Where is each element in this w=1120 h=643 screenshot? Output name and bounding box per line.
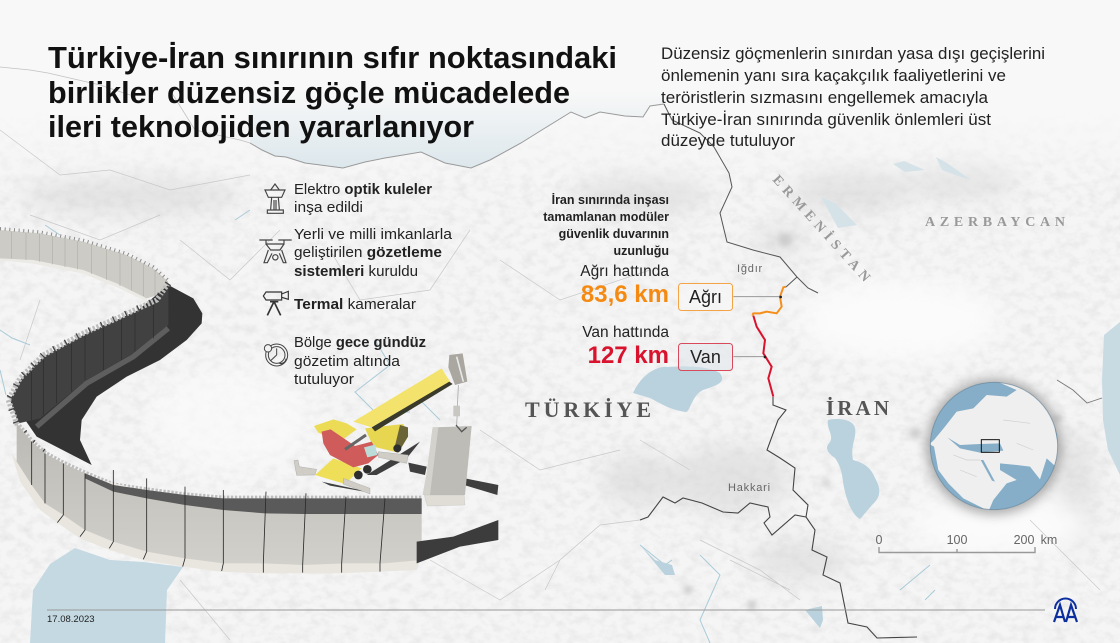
scale bar: 0 (876, 533, 883, 547)
text: surveillance systems: Yerli ve milli imkanlarla (294, 226, 453, 243)
van figure (582, 324, 669, 369)
text: day and night: tutuluyor (294, 371, 354, 388)
city labels: Hakkari (728, 482, 771, 494)
country labels: AZERBAYCAN (925, 215, 1065, 230)
wall length heading (543, 192, 669, 258)
van figure: 127 km (588, 342, 669, 369)
lake van (633, 366, 722, 412)
feature list (259, 181, 453, 388)
lake urmia (827, 419, 879, 519)
scale bar: 100 (947, 533, 967, 547)
title (48, 40, 617, 144)
text: thermal cameras: Termal kameralar (294, 296, 416, 313)
icon: tower (265, 184, 285, 213)
crane boom (353, 353, 467, 431)
text: electro optic towers (294, 181, 432, 216)
front wall panels (17, 423, 422, 573)
far wall section (0, 229, 168, 299)
text: surveillance systems: sistemleri kuruldu (294, 263, 418, 280)
title: ileri teknolojiden yararlanıyor (48, 109, 474, 144)
country labels: TÜRKİYE (525, 397, 651, 422)
intro paragraph: Türkiye-İran sınırında güvenlik önlemleri üst (661, 110, 991, 129)
locator globe (923, 378, 1062, 517)
wall illustration (0, 229, 498, 573)
intro paragraph: Düzensiz göçmenlerin sınırdan yasa dışı geçişlerini (661, 45, 1045, 63)
city labels (728, 263, 771, 494)
logo: AA (1054, 598, 1077, 622)
hook (453, 385, 467, 432)
agri figure (580, 263, 669, 308)
crane deck (315, 458, 362, 484)
wheels (354, 444, 401, 479)
van label box (678, 344, 732, 370)
country labels (525, 171, 1065, 422)
mobile crane and wall panel (294, 353, 498, 506)
red cabin (322, 429, 378, 467)
lakes in the north-east (821, 157, 971, 228)
text: electro optic towers: inşa edildi (294, 199, 363, 216)
agri label box (678, 284, 732, 310)
intro paragraph: teröristlerin sızmasını engellemek amacıyla (661, 89, 989, 107)
wall length heading: güvenlik duvarının (559, 227, 669, 241)
text: day and night: Bölge gece gündüz (294, 334, 426, 351)
outriggers (294, 452, 408, 494)
intro paragraph: düzeyde tutuluyor (661, 132, 796, 150)
wall length heading: tamamlanan modüler (543, 210, 669, 224)
city spots (683, 233, 1062, 610)
wall shadow right (417, 520, 498, 563)
agri label box: Ağrı (689, 287, 722, 307)
text: surveillance systems (294, 226, 453, 280)
crane turret (314, 419, 357, 442)
truck body (365, 424, 408, 453)
van label box: Van (690, 347, 721, 367)
scale bar: km (1041, 533, 1057, 547)
title: Türkiye-İran sınırının sıfır noktasındaki (48, 40, 617, 75)
mediterranean sea (30, 548, 183, 643)
agri wall line (733, 287, 786, 316)
icon: day and night clock (264, 344, 288, 366)
barbed wire (8, 283, 422, 498)
country labels: ERMENİSTAN (769, 171, 874, 285)
agri figure: Ağrı hattında (580, 263, 669, 280)
dark inner wall (10, 285, 168, 427)
wall length heading: uzunluğu (613, 244, 669, 258)
text: day and night: gözetim altında (294, 353, 401, 370)
ground shadow (18, 285, 202, 465)
intro paragraph: önlemenin yanı sıra kaçakçılık faaliyetlerini ve (661, 67, 1006, 85)
country labels: İRAN (826, 396, 889, 420)
text: day and night (294, 334, 426, 388)
crane shadows (322, 442, 498, 495)
city labels: Iğdır (737, 263, 763, 275)
caspian sea (1102, 322, 1120, 475)
icon: thermal camera (263, 291, 288, 315)
text: surveillance systems: geliştirilen gözetleme (294, 244, 442, 261)
black sea (250, 90, 664, 168)
title: birlikler düzensiz göçle mücadelede (48, 75, 570, 110)
van wall line (733, 316, 773, 397)
text: electro optic towers: Elektro optik kuleler (294, 181, 432, 198)
wall panel (423, 426, 472, 506)
scale bar: 200 (1014, 533, 1034, 547)
wall length heading: İran sınırında inşası (552, 192, 669, 207)
agri figure: 83,6 km (581, 281, 669, 308)
van figure: Van hattında (582, 324, 669, 341)
date: 17.08.2023 (47, 614, 95, 625)
scale bar (876, 533, 1057, 552)
front wall base (12, 453, 422, 573)
icon: drone (259, 240, 292, 263)
intro paragraph (661, 45, 1045, 150)
